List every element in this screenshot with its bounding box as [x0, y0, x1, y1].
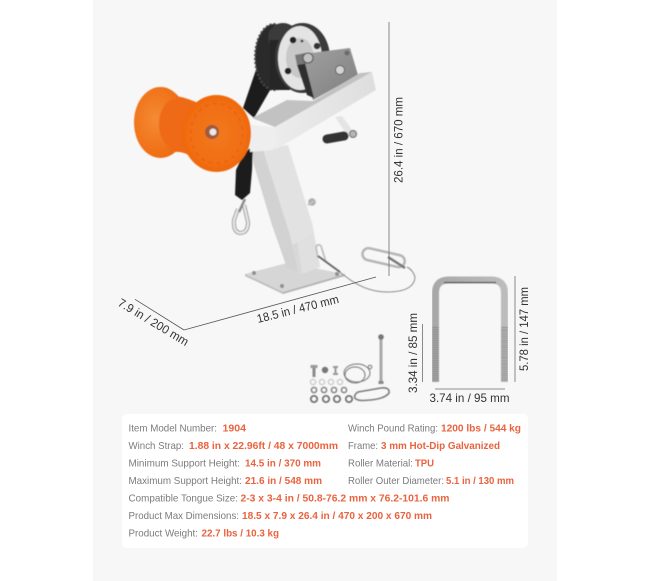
spec: roller material: TPU [415, 458, 434, 470]
support column [250, 145, 320, 275]
spec: weight: Product Weight: [128, 528, 198, 540]
winch strap [235, 55, 275, 200]
spec: pound rating: 1200 lbs / 544 kg [441, 424, 521, 434]
spec: pound rating: Winch Pound Rating: [348, 424, 438, 434]
spec: model number: Item Model Number: [128, 424, 217, 434]
spec: maximum height [128, 476, 322, 487]
spec: tongue size: Compatible Tongue Size: [128, 494, 238, 504]
carabiner [355, 388, 389, 400]
mounting tray [250, 72, 376, 152]
small bolts and nuts [310, 365, 338, 377]
spec: max dimensions: Product Max Dimensions: [128, 511, 239, 522]
product illustration: winch stand [134, 23, 415, 294]
spec: maximum height: 21.6 in / 548 mm [245, 476, 322, 487]
spec: roller material: Roller Material: [348, 458, 413, 470]
dimension: U-bolt height: 5.78 in / 147 mm [517, 287, 531, 371]
hardware kit [310, 334, 389, 402]
spec: strap: Winch Strap: [128, 441, 184, 452]
spec: max dimensions [128, 511, 432, 522]
spec: tongue size: 2-3 x 3-4 in / 50.8-76.2 mm x 76.2-101.6 mm [240, 494, 450, 504]
spec: tongue size [128, 494, 450, 504]
dimension: height: 26.4 in / 670 mm [392, 97, 406, 183]
U-bolt [436, 280, 504, 382]
spec: roller diameter [348, 476, 514, 487]
spec: pound rating [348, 424, 521, 434]
spec: minimum height [128, 458, 321, 470]
spec: minimum height: 14.5 in / 370 mm [245, 458, 321, 470]
specifications card [122, 414, 528, 548]
spec: model number: 1904 [222, 424, 246, 434]
spec: minimum height: Minimum Support Height: [128, 458, 240, 470]
spec: frame: 3 mm Hot-Dip Galvanized [381, 441, 500, 452]
spec: weight [128, 528, 279, 540]
spec: roller diameter: 5.1 in / 130 mm [446, 476, 514, 487]
dimension: U-bolt width: 3.74 in / 95 mm [430, 391, 510, 405]
spec: max dimensions: 18.5 x 7.9 x 26.4 in / 470 x 200 x 670 mm [242, 511, 432, 522]
dimension: U-bolt leg: 3.34 in / 85 mm [406, 313, 420, 393]
winch side plate [295, 48, 358, 100]
spec: maximum height: Maximum Support Height: [128, 476, 242, 487]
winch gear and drum [255, 23, 330, 93]
spec: weight: 22.7 lbs / 10.3 kg [202, 528, 279, 540]
orange roller [134, 87, 251, 172]
long bolt [378, 334, 384, 384]
spec: frame: Frame: [348, 441, 378, 452]
dimension: length: 18.5 in / 470 mm [255, 292, 340, 326]
hook [234, 199, 248, 233]
washers [310, 379, 352, 402]
wire loop [344, 364, 372, 383]
spec: strap: 1.88 in x 22.96ft / 48 x 7000mm [189, 441, 338, 452]
spec: roller diameter: Roller Outer Diameter: [348, 476, 444, 487]
crank handle [327, 116, 356, 139]
background panel [93, 0, 557, 581]
dimension: width: 7.9 in / 200 mm [115, 296, 191, 349]
base plate [245, 263, 345, 294]
safety cable and carabiner [316, 245, 415, 292]
dimension: length [184, 277, 376, 330]
